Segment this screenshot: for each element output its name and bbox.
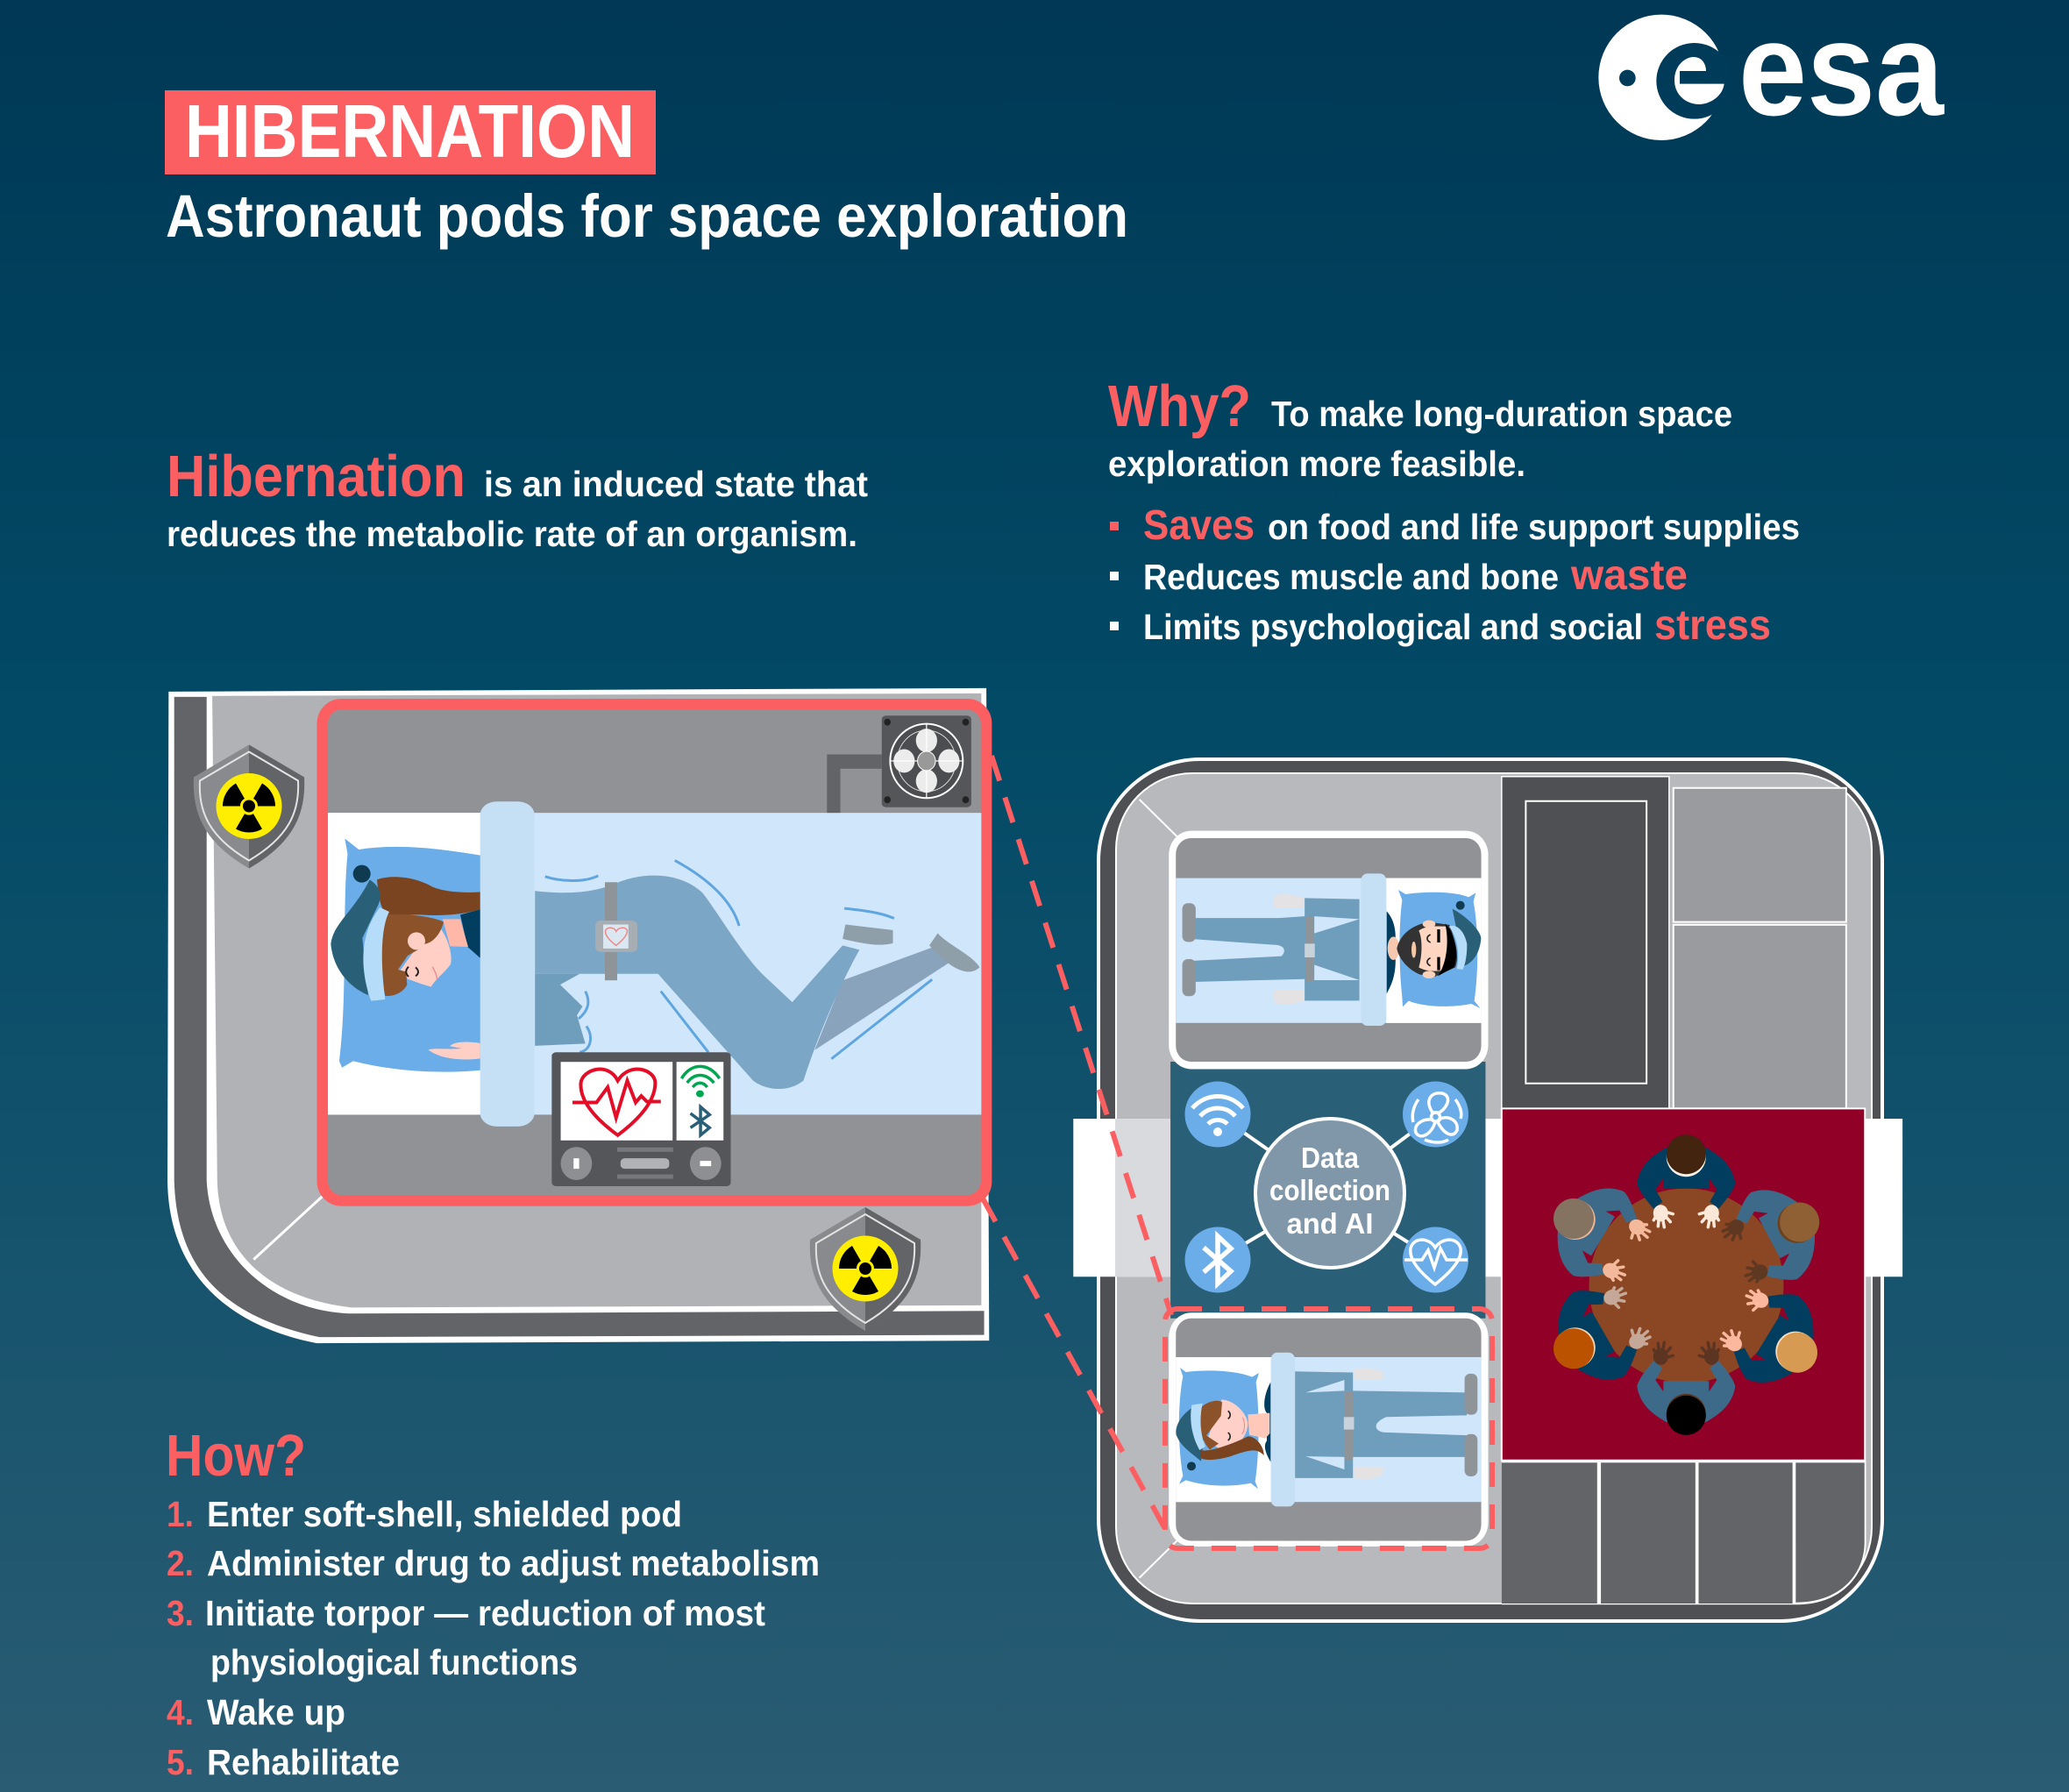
pod: red outlined interior — [323, 704, 986, 1200]
text block: hibernation definition: reduces the metabolic rate of an organism. — [167, 514, 857, 554]
text block: why: To make long-duration space — [1271, 394, 1732, 434]
text block: hibernation definition: is an induced state that — [484, 464, 868, 504]
panel: enlarged pod section — [167, 688, 989, 1343]
diagram: data collection and AI: Data — [1301, 1141, 1360, 1174]
person: top left — [1531, 1166, 1661, 1298]
icon: radiation shield, bottom right — [810, 1207, 921, 1331]
title badge: HIBERNATION: HIBERNATION — [185, 90, 635, 174]
text block: how: 3. — [167, 1593, 194, 1633]
astronaut body in pod — [535, 876, 979, 1089]
text block: how: 5. — [167, 1742, 194, 1782]
pod cuff — [480, 801, 535, 1127]
logo: esa — [1598, 0, 1945, 144]
arrow: dashed zoom line, top — [992, 756, 1171, 1315]
text block: how — [166, 1423, 820, 1782]
pod: female astronaut body — [1169, 1312, 1489, 1547]
arrow: dashed zoom line, bottom — [983, 1198, 1169, 1535]
text block: why: on food and life support supplies — [1268, 507, 1800, 547]
text block: how: physiological functions — [210, 1642, 578, 1682]
subtitle: Astronaut pods for space exploration — [166, 182, 1128, 250]
person: bottom left — [1532, 1269, 1661, 1401]
text block: why: Saves — [1143, 502, 1255, 549]
callout: dashed highlight on pod — [1165, 1309, 1492, 1548]
text block: why — [1108, 373, 1800, 649]
text block: hibernation definition — [167, 444, 868, 554]
panel: data collection background — [1170, 1062, 1485, 1319]
room: red common area — [1502, 1108, 1865, 1461]
text block: why: waste — [1570, 552, 1688, 599]
text block: why: Limits psychological and social — [1143, 607, 1643, 647]
text block: how: Enter soft-shell, shielded pod — [207, 1494, 682, 1534]
door: left airlock — [1073, 1119, 1170, 1276]
icon: fan — [1403, 1082, 1468, 1147]
astronaut head and hand in large pod — [331, 865, 480, 1059]
text block: why: stress — [1654, 602, 1771, 649]
person: bottom right — [1710, 1273, 1840, 1404]
text block: how: 1. — [167, 1494, 194, 1534]
meeting table with six astronauts — [1531, 1134, 1840, 1435]
monitor: vital signs — [551, 1052, 731, 1186]
diagram: data collection and AI — [1185, 1082, 1468, 1292]
text block: how: Wake up — [207, 1692, 345, 1732]
text block: why: Why? — [1108, 373, 1251, 439]
text block: hibernation definition: Hibernation — [167, 444, 466, 509]
person: top right — [1712, 1170, 1840, 1299]
door: right airlock — [1865, 1119, 1902, 1276]
diagram: data collection and AI: collection — [1269, 1174, 1390, 1206]
cuffs — [1271, 873, 1386, 1506]
text block: how: Initiate torpor — reduction of most — [205, 1593, 765, 1633]
text block: why: Reduces muscle and bone — [1143, 557, 1559, 597]
panel: habitat floor plan — [1073, 757, 1902, 1623]
text block: how: 4. — [167, 1692, 194, 1732]
female astronaut head on pillow — [1176, 1368, 1270, 1489]
icon: wifi — [1185, 1082, 1250, 1147]
icon: ventilation fan — [827, 715, 971, 813]
pillow — [339, 839, 485, 1072]
storage: bottom lockers — [1502, 1461, 1866, 1604]
icon: heart rate — [1403, 1227, 1468, 1292]
pod: male astronaut body — [1169, 831, 1489, 1069]
text block: how: Rehabilitate — [207, 1742, 400, 1782]
text block: how: Administer drug to adjust metabolism — [207, 1543, 820, 1583]
male astronaut head on pillow — [1387, 890, 1481, 1008]
person: bottom — [1637, 1342, 1735, 1435]
diagram: data collection and AI: and AI — [1287, 1207, 1373, 1240]
storage: dark compartment — [1502, 777, 1669, 1108]
text block: how: 2. — [167, 1543, 194, 1583]
storage: grey shelves — [1674, 788, 1846, 1108]
text block: why: exploration more feasible. — [1108, 444, 1525, 484]
icon: radiation shield, top left — [194, 745, 304, 868]
icon: bluetooth — [1185, 1227, 1250, 1292]
person: top — [1637, 1134, 1735, 1227]
text block: how: How? — [166, 1423, 306, 1489]
